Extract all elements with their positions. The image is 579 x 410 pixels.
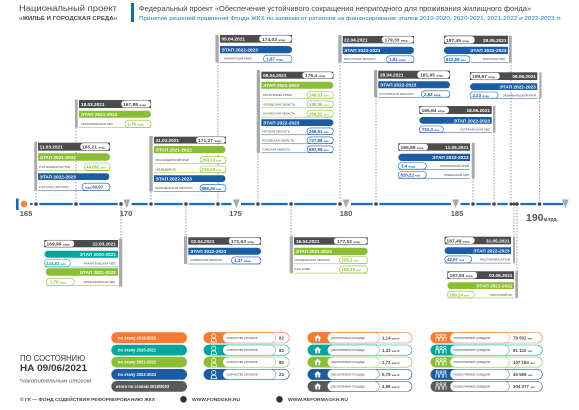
footer [20, 396, 348, 403]
card: 22.04.2021: 1,81 млрд. [389, 57, 406, 62]
card: 08.04.2021: 249,51 млн [309, 93, 329, 98]
card: 08.04.2021: 185,96 млн [309, 102, 329, 107]
stats: resettled area: 1,33 млн м² [382, 348, 400, 353]
card: 09.06.2021: ЭТАП 2022-2023 [499, 84, 536, 90]
card: 28.04.2021 [374, 70, 450, 97]
card: 18.03.2021: 18.03.2021 [81, 102, 105, 107]
stats: number of regions: количество регионов [226, 372, 258, 376]
card: 28.04.2021: 28.04.2021 [380, 73, 404, 78]
stats: resettled citizens: переселяемые граждане [454, 372, 491, 376]
card: 28.04.2021: ЭТАП 2022-2023 [380, 83, 417, 88]
card: 08.04.2021 [257, 70, 333, 153]
card: 11.03.2021: 165,21 млрд. [82, 145, 106, 151]
stats: resettled citizens: 107 184 чел. [513, 360, 536, 365]
card: 08.04.2021: КАЛУЖСКАЯ ОБЛАСТЬ [263, 112, 295, 116]
card: 31.05.2021: ЭТАП 2022-2023 [473, 249, 510, 254]
card: 11.05.2021 [398, 143, 475, 178]
card: 31.03.2021: КРАСНОДАРСКИЙ КРАЙ [156, 158, 189, 162]
card: 18.03.2021: 167,88 млрд. [123, 102, 147, 108]
stats: resettled citizens: 78 502 чел. [513, 336, 533, 341]
card: 31.03.2021: 250,13 млн [202, 158, 222, 163]
card: 08.04.2021: ОРЛОВСКАЯ ОБЛАСТЬ [263, 102, 295, 106]
card: 09.06.2021 [470, 72, 542, 98]
card: 31.03.2021 [149, 136, 226, 192]
card: 11.03.2021: Р-КА БАШКОРТОСТАН [39, 165, 70, 169]
stats: resettled area: расселяемая площадь [331, 360, 365, 364]
card: 28.05.2021 [444, 36, 512, 63]
card: 15.04.2021: 255,2 млн [342, 258, 359, 263]
card: 31.05.2021 [445, 236, 515, 263]
status block: ПО СОСТОЯНИЮ [20, 354, 85, 363]
card: 05.04.2021: ЭТАП 2022-2023 [222, 48, 258, 52]
card: 08.04.2021: 727,88 млн [309, 138, 329, 143]
card: 05.04.2021: КАМЧАТСКИЙ КРАЙ [224, 56, 252, 60]
stats: resettled area: расселяемая площадь [331, 348, 365, 352]
card: 31.03.2021: 210,23 млн [202, 167, 222, 172]
stats: resettled citizens: 304 377 чел. [513, 384, 536, 389]
card: 05.04.2021: 174,03 млрд. [262, 37, 286, 43]
card: 22.04.2021: 179,33 млрд. [384, 38, 408, 44]
stats: number of regions: количество регионов [226, 336, 258, 340]
card: 22.03.2021 [44, 239, 122, 287]
card: 31.05.2021: 42,67 млн [447, 257, 465, 262]
header: federal project [131, 3, 562, 22]
card: 11.05.2021: 11.05.2021 [445, 145, 469, 150]
card: 02.04.2021: САМАРСКАЯ ОБЛАСТЬ [190, 258, 222, 262]
card: 18.05.2021 [419, 106, 495, 133]
stats: resettled citizens: переселяемые граждане [454, 360, 491, 364]
card: 11.03.2021: ЭТАП 2022-2023 [40, 175, 76, 180]
card: 28.04.2021: РОСТОВСКАЯ ОБЛАСТЬ [380, 92, 414, 96]
card: 08.04.2021: 266,32 млн [309, 111, 329, 116]
legend: stage pills [111, 332, 187, 392]
card: 28.05.2021: 187,45 млрд. [446, 38, 470, 44]
card: 08.04.2021: 687,99 млн [309, 147, 329, 152]
card: 31.03.2021: ЭТАП 2021-2022 [156, 148, 192, 152]
card: 05.04.2021 [215, 35, 292, 62]
timeline [16, 198, 569, 224]
card: 11.03.2021: 11.03.2021 [40, 145, 63, 150]
legend: stage pills: по этапу 2022-2023 [118, 372, 157, 377]
legend: stage pills: по этапу 2020-2021 [118, 348, 157, 353]
card: 31.03.2021: 171,27 млрд. [198, 138, 222, 144]
card: 28.05.2021: 612,58 млн [446, 57, 466, 62]
card: 22.03.2021: 22.03.2021 [93, 242, 116, 246]
card: 28.05.2021: ЭТАП 2022-2023 [470, 48, 507, 53]
card: 11.03.2021: млрд 60,97 [85, 185, 104, 190]
card: 18.05.2021: 18.05.2021 [467, 108, 490, 113]
timeline: 175 [229, 209, 242, 218]
stats: number of regions: 80 [279, 360, 284, 365]
card: 08.04.2021: ПСКОВСКАЯ ОБЛАСТЬ [262, 138, 294, 142]
card: 22.03.2021: АРХАНГЕЛЬСКАЯ ОБЛ. [84, 280, 116, 284]
card: 08.04.2021: ЭТАП 2022-2023 [263, 120, 300, 126]
card: 31.03.2021: 888,26 млн [202, 186, 222, 191]
card: 31.03.2021: ВОРОНЕЖСКАЯ ОБЛАСТЬ [156, 186, 193, 190]
timeline: 180 [340, 209, 352, 218]
stats: number of regions: количество регионов [226, 348, 258, 352]
card: 18.03.2021 [75, 100, 151, 128]
card: 09.06.2021: 09.06.2021 [512, 74, 536, 79]
card: 09.06.2021: 2,23 млрд. [472, 93, 490, 98]
card: 31.03.2021: 31.03.2021 [156, 138, 179, 143]
stats: resettled citizens: 81 122 чел. [513, 348, 533, 353]
card: 02.04.2021: 172,63 млрд. [231, 239, 255, 245]
card: 08.04.2021: 266,61 млн [309, 129, 329, 134]
card: 18.03.2021: ЭТАП 2021-2022 [81, 112, 118, 117]
card: 05.04.2021: 05.04.2021 [222, 37, 245, 42]
stats: number of regions: 82 [279, 348, 284, 353]
stats: number of regions: 82 [279, 336, 284, 341]
stats: number of regions: количество регионов [226, 360, 258, 364]
legend: stage pills: по этапу 2019-2020 [118, 336, 157, 340]
card: 22.04.2021: 22.04.2021 [344, 38, 368, 42]
header: national project: «ЖИЛЬЕ И ГОРОДСКАЯ СРЕДА» [19, 16, 117, 22]
stats: resettled citizens: переселяемые граждане [454, 384, 491, 388]
card: 11.03.2021: Р-КА САХА (ЯКУТИЯ) [39, 185, 68, 189]
card: 31.03.2021: ЭТАП 2022-2023 [156, 176, 192, 182]
header: national project [19, 3, 117, 22]
card: 05.04.2021: 1,87 млрд. [266, 56, 284, 61]
card: 18.03.2021: 2,76 млрд. [128, 122, 145, 127]
card: 15.04.2021: 15.04.2021 [296, 239, 320, 244]
header: national project: Национальный проект [19, 3, 117, 13]
card: 11.05.2021: ТЮМЕНСКАЯ ОБЛ [443, 173, 469, 177]
card: 28.04.2021: 181,95 млрд. [420, 73, 444, 79]
card: 15.04.2021: МАГАДАНСКАЯ ОБЛАСТЬ [294, 258, 330, 262]
card: 03.06.2021 [447, 271, 518, 298]
card: 15.04.2021: Р-КА КОМИ [294, 267, 310, 271]
card: 22.03.2021: АРХАНГЕЛЬСКАЯ ОБЛ. [84, 262, 116, 266]
footer: WWW.FONDGKH.RU [192, 397, 240, 402]
legend: stage pills: итого по этапам 2019/2023 [116, 384, 170, 389]
stats: resettled area: расселяемая площадь [331, 384, 365, 388]
card: 22.04.2021: ЭТАП 2022-2023 [344, 48, 381, 53]
card: 31.05.2021: РЕСПУБЛИКА АЛТАЙ [480, 258, 510, 262]
card: 31.05.2021: 187,49 млрд. [446, 238, 470, 244]
card: 11.05.2021: ЭТАП 2022-2023 [432, 155, 469, 160]
card: 22.03.2021: 1,78 млрд. [50, 280, 67, 285]
card: 09.06.2021: ЗАБАЙКАЛЬСКИЙ КРАЙ [503, 94, 536, 98]
card: 11.05.2021: 826,22 млн [400, 173, 421, 178]
card: 03.06.2021: 03.06.2021 [489, 273, 513, 278]
card: 31.05.2021: 31.05.2021 [486, 238, 510, 243]
card: 03.06.2021: 189,24 млн [450, 292, 470, 297]
stats: resettled citizens: 45 569 чел. [513, 372, 533, 377]
card: 02.04.2021: 02.04.2021 [191, 239, 215, 244]
card: 08.04.2021: ЭТАП 2021-2022 [263, 83, 300, 88]
status block: НА 09/06/2021 [20, 363, 88, 374]
card: 28.05.2021: АМУРСКАЯ ОБЛ. [482, 57, 506, 61]
stats: resettled area: 1,72 млн м² [382, 360, 400, 365]
stats: resettled citizens [430, 332, 542, 392]
card: 15.04.2021 [290, 236, 368, 273]
stats: resettled citizens: переселяемые граждане [454, 348, 491, 352]
card: 31.03.2021: НЕНЕЦКИЙ АО [156, 167, 177, 171]
card: 18.05.2021: 751,3 млн [422, 127, 440, 132]
stats: resettled area: 1,14 млн м² [382, 336, 400, 341]
stats: resettled area: расселяемая площадь [331, 336, 365, 340]
card: 28.04.2021: 2,62 млрд. [424, 92, 441, 97]
timeline: 165 [20, 209, 32, 218]
card: 22.03.2021: 224,81 млн [46, 261, 66, 266]
card: 08.04.2021: 176,4 млрд. [305, 73, 326, 79]
card: 22.03.2021: ЭТАП 2020-2021 [80, 252, 116, 257]
card: 18.05.2021: 186,64 млрд. [422, 108, 445, 114]
card: 18.05.2021: АСТРАХАНСКАЯ ОБЛ [460, 128, 490, 132]
card: 08.04.2021: ТОМСКАЯ ОБЛАСТЬ [262, 148, 291, 152]
card: 11.03.2021 [34, 142, 110, 191]
card: 11.05.2021: ПРИМОРСКИЙ КРАЙ [440, 164, 469, 168]
card: 08.04.2021: 08.04.2021 [263, 73, 287, 78]
card: 08.04.2021: РЕСПУБЛИКА КРЫМ [263, 93, 292, 97]
timeline: 190млрд. [526, 212, 559, 224]
stats: number of regions: 23 [279, 372, 284, 377]
card: 11.03.2021: 44,062 млн [86, 164, 106, 170]
stats: number of regions [204, 332, 289, 380]
card: 22.04.2021: ИРКУТСКАЯ ОБЛАСТЬ [344, 57, 376, 61]
card: 22.03.2021: ЭТАП 2021-2022 [80, 270, 116, 275]
card: 03.06.2021: 187,64 млрд. [450, 273, 473, 279]
card: 15.04.2021: ЭТАП 2021-2022 [296, 249, 332, 254]
status block [19, 354, 92, 384]
header: federal project: Принятие решений правления Фонда ЖКХ по заявкам от регионов на финансирование этапов 2019-2020, 2020-2021, 2021-2022 и 2022-2023 гг. [139, 15, 562, 22]
card: 03.06.2021: ЧУКОТСКИЙ АО. [490, 293, 513, 297]
card: 02.04.2021: ЭТАП 2022-2023 [190, 249, 227, 254]
timeline: 170 [120, 209, 132, 218]
card: 28.05.2021: 28.05.2021 [483, 38, 507, 43]
card: 09.06.2021: 189,67 млрд. [472, 74, 496, 80]
timeline: 185 [451, 209, 463, 218]
card: 18.05.2021: ЭТАП 2022-2023 [454, 118, 490, 123]
card: 15.04.2021: 196,19 млн [342, 267, 362, 272]
stats: resettled area [308, 332, 412, 392]
card: 02.04.2021: 1,37 млрд. [234, 258, 251, 263]
card: 15.04.2021: 177,52 млрд. [337, 239, 361, 245]
card: 11.05.2021: 3,4 млрд. [401, 164, 416, 169]
card: 03.06.2021: ЭТАП 2021-2022 [476, 284, 513, 289]
header: federal project: Федеральный проект «Обеспечение устойчивого сокращения непригодного для проживания жилищного фонда» [139, 5, 531, 13]
footer: WWW.REFORMAGKH.RU [288, 397, 348, 402]
card: 11.05.2021: 185,89 млрд. [400, 145, 424, 151]
card: 22.03.2021: 169,99 млрд. [46, 242, 70, 248]
card: 08.04.2021: КУРСКАЯ ОБЛАСТЬ [262, 130, 290, 134]
legend: stage pills: по этапу 2021-2022 [118, 360, 157, 365]
card: 11.03.2021: ЭТАП 2021-2022 [40, 155, 76, 160]
card: 18.03.2021: АРХАНГЕЛЬСКАЯ ОБЛ [81, 122, 113, 126]
card: 02.04.2021 [184, 236, 261, 264]
footer: © ГК — ФОНД СОДЕЙСТВИЯ РЕФОРМИРОВАНИЮ ЖКХ [20, 397, 155, 402]
stats: resettled citizens: переселяемые граждане [454, 336, 491, 340]
stats: resettled area: расселяемая площадь [331, 372, 365, 376]
dashed connector lines [36, 62, 540, 271]
status block: *накопительным итогом [19, 378, 92, 384]
card: 22.04.2021 [338, 35, 414, 63]
stats: resettled area: 0,79 млн м² [382, 372, 400, 377]
stats: resettled area: 4,98 млн м² [382, 384, 400, 389]
